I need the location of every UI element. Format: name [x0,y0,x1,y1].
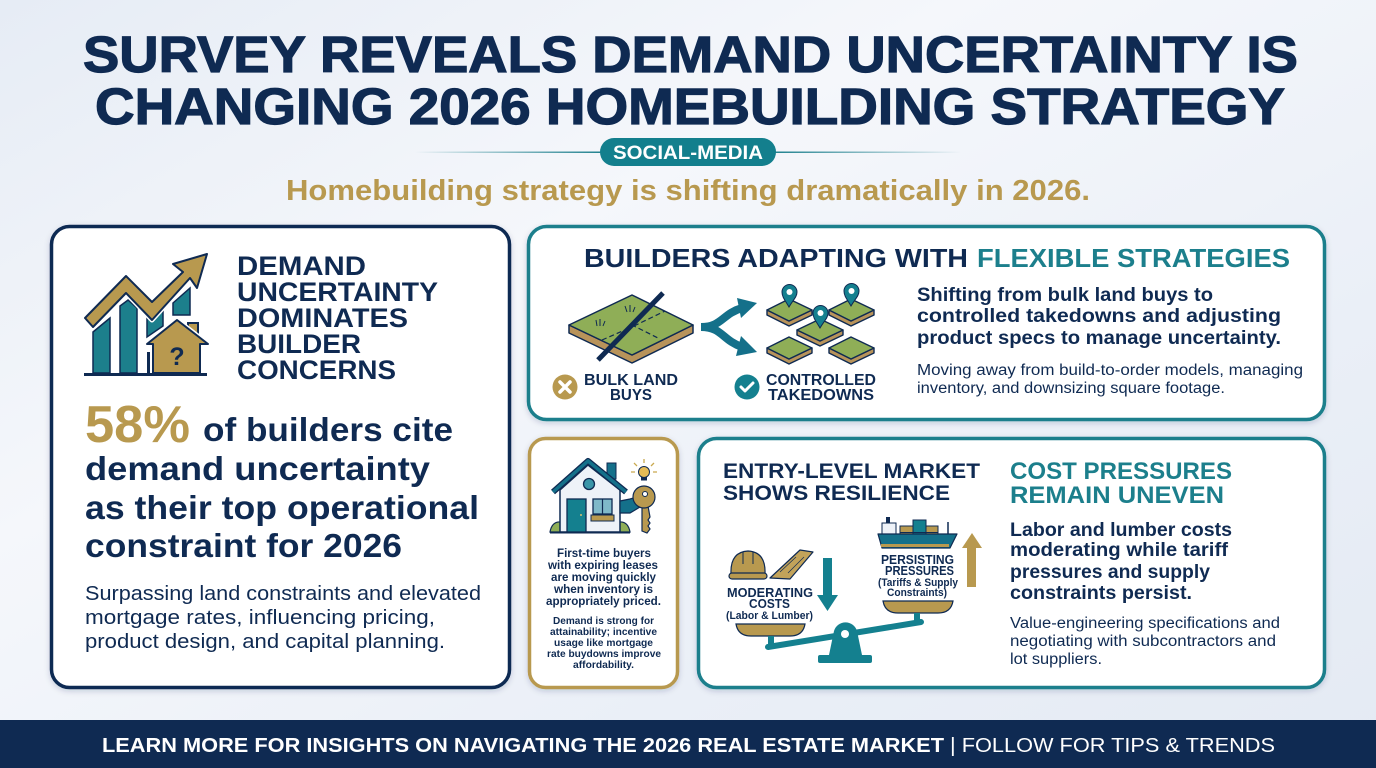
text: shift description [917,285,1303,397]
heading: cost pressures: COST PRESSURES [1010,458,1232,485]
text: first-time buyers: with expiring leases [547,560,658,572]
subtitle: Homebuilding strategy is shifting dramatically in 2026. [286,175,1090,207]
title: SURVEY REVEALS DEMAND UNCERTAINTY IS [83,26,1298,83]
arrow: costs down [817,558,838,611]
key statistic [85,396,479,564]
label: controlled takedowns: CONTROLLED [766,372,876,389]
panel: demand uncertainty [52,226,510,688]
heading: entry-level market: SHOWS RESILIENCE [723,481,950,505]
text: cost pressures: lot suppliers. [1010,651,1102,668]
label: moderating costs: COSTS [749,596,790,611]
text: first-time buyers: First-time buyers [557,548,651,560]
key statistic: 58% [85,396,190,454]
heading: flexible strategies: FLEXIBLE STRATEGIES [977,243,1290,273]
label: bulk land buys: BUYS [610,387,652,404]
label: bulk land buys: BULK LAND [584,372,678,389]
icon: cargo ship [878,517,957,548]
heading: cost pressures: REMAIN UNEVEN [1010,482,1224,509]
supporting text: Surpassing land constraints and elevated [85,583,481,605]
text: first-time buyers: affordability. [573,659,634,671]
text: first-time buyers: attainability; incentive [550,626,657,638]
category tag [415,138,961,166]
heading: demand uncertainty [237,251,438,385]
title: CHANGING 2026 HOMEBUILDING STRATEGY [95,78,1285,135]
heading: flexible strategies: BUILDERS ADAPTING WITH [584,243,968,273]
icon: hard hat and lumber [729,550,813,579]
icon: rising chart with house [84,254,208,376]
heading: demand uncertainty: CONCERNS [237,355,396,385]
panel: flexible strategies [528,226,1324,420]
key statistic: as their top operational [85,489,479,526]
arrow: splitting paths [701,298,757,356]
panel: first-time buyers [530,438,678,688]
label: moderating costs [726,585,813,622]
label: controlled takedowns [734,372,876,404]
label: persisting pressures [878,552,959,599]
label: persisting pressures: PRESSURES [885,563,954,578]
text: first-time buyers: usage like mortgage [554,637,653,649]
text: cost pressures: constraints persist. [1010,583,1192,604]
text: shift description: Moving away from build-to-order models, managing [917,362,1303,379]
label: moderating costs: (Labor & Lumber) [726,610,813,622]
icon: rising chart with house: ? [169,343,185,371]
panel: entry-level market and cost pressures [698,438,1324,688]
text: first-time buyers: Demand is strong for [553,615,654,627]
heading: demand uncertainty: DEMAND [237,251,366,281]
supporting text: product design, and capital planning. [85,631,445,653]
heading: demand uncertainty: BUILDER [237,329,361,359]
title [83,26,1298,135]
heading: demand uncertainty: DOMINATES [237,303,408,333]
heading: entry-level market: ENTRY-LEVEL MARKET [723,459,980,483]
label: controlled takedowns: TAKEDOWNS [768,387,874,404]
label: persisting pressures: Constraints) [887,587,947,599]
label: persisting pressures: (Tariffs & Supply [878,577,959,589]
key statistic: constraint for 2026 [85,527,402,564]
text: cost pressures [1010,520,1280,668]
footer banner [0,720,1376,768]
text: shift description: product specs to manage uncertainty. [917,328,1281,349]
text: first-time buyers: are moving quickly [551,572,657,584]
text: first-time buyers: appropriately priced. [546,596,661,608]
text: cost pressures: Labor and lumber costs [1010,520,1232,541]
icon: house with key and lightbulb [550,459,657,533]
label: moderating costs: MODERATING [727,585,813,600]
text: cost pressures: pressures and supply [1010,562,1210,583]
text: cost pressures: negotiating with subcontractors and [1010,633,1276,650]
text: shift description: controlled takedowns and adjusting [917,306,1281,327]
text: cost pressures: moderating while tariff [1010,540,1229,561]
text: shift description: Shifting from bulk land buys to [917,285,1213,306]
text: first-time buyers [546,548,661,671]
supporting text [85,583,481,653]
text: first-time buyers: when inventory is [553,584,653,596]
text: shift description: inventory, and downsizing square footage. [917,380,1225,397]
arrow: pressures up [962,533,982,587]
text: first-time buyers: rate buydowns improve [547,648,661,660]
key statistic: demand uncertainty [85,450,431,487]
footer banner: | FOLLOW FOR TIPS & TRENDS [950,734,1275,757]
key statistic: of builders cite [203,411,453,448]
label: bulk land buys [552,372,678,404]
heading: flexible strategies [584,243,1290,273]
heading: cost pressures [1010,458,1232,509]
text: cost pressures: Value-engineering specifications and [1010,615,1280,632]
category tag: SOCIAL-MEDIA [613,143,763,164]
heading: entry-level market [723,459,980,505]
supporting text: mortgage rates, influencing pricing, [85,607,435,629]
icon: controlled takedown parcels [767,284,874,364]
icon: scale [736,601,953,663]
label: persisting pressures: PERSISTING [881,552,954,567]
footer banner: LEARN MORE FOR INSIGHTS ON NAVIGATING THE 2026 REAL ESTATE MARKET [102,734,945,757]
icon: crossed-out bulk land [569,293,693,363]
chart: balance scale [726,517,982,663]
heading: demand uncertainty: UNCERTAINTY [237,277,438,307]
